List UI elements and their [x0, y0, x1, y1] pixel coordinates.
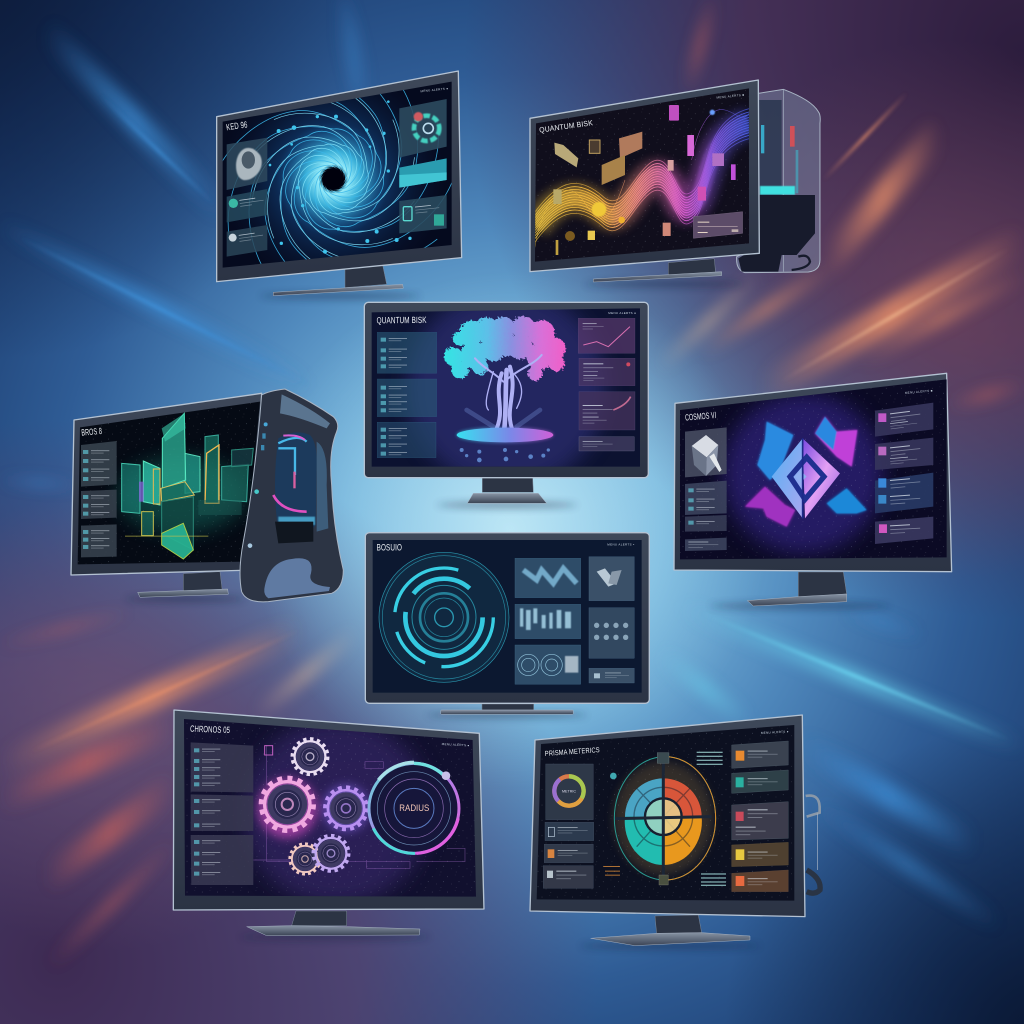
dial label: RADIUS [399, 803, 429, 813]
side cable device [806, 796, 820, 893]
crystal emblem [680, 379, 947, 559]
monitor 8: radial metrics dashboard [530, 715, 820, 946]
title: BOSUIO [377, 543, 402, 553]
top bar: MENU ALERTS ● [420, 86, 449, 93]
wave chart [535, 88, 749, 262]
top bar: MENU ALERTS ■ [905, 389, 933, 395]
title: COSMOS VI [685, 410, 717, 423]
bezel [217, 71, 462, 282]
left panels [191, 742, 253, 885]
top bar: MENU ALERTS ● [761, 730, 789, 735]
spiral chart [222, 90, 452, 264]
screen [373, 540, 642, 693]
floating tiles [553, 105, 736, 255]
left panels [377, 332, 437, 458]
monitor 3: quantum tree dashboard [364, 288, 648, 503]
monitor 6: concentric rings dashboard [365, 533, 649, 714]
title: PRISMA METERICS [545, 745, 600, 758]
monitor 1: spiral galaxy dashboard [212, 58, 462, 300]
top bar: MENU ALERTS ▪ [607, 543, 635, 547]
holographic panes [78, 402, 260, 564]
bezel [173, 710, 484, 910]
title: QUANTUM BISK [377, 315, 427, 325]
monitor 5: crystal dashboard [674, 373, 952, 606]
right panels [399, 99, 447, 233]
title: BROS 8 [81, 426, 102, 438]
stand [247, 911, 420, 936]
screen [537, 725, 794, 901]
monitor 7: gears and radius dashboard [173, 710, 484, 936]
left panels [543, 764, 594, 888]
stand [593, 259, 722, 282]
data card [693, 212, 743, 238]
top bar: MENU ALERTS ● [442, 742, 470, 747]
curved PC tower [240, 389, 343, 602]
gears chart [184, 718, 476, 905]
stand [591, 915, 750, 946]
ring chart [379, 552, 509, 682]
sharp ray highlights [20, 93, 1010, 752]
left panels [227, 138, 267, 257]
screen [78, 402, 260, 564]
right panels [578, 318, 635, 451]
monitor 4: holographic panes dashboard [71, 389, 343, 602]
stand [441, 704, 573, 714]
title: CHRONOS 05 [190, 724, 230, 735]
bezel [71, 393, 262, 575]
radial wheel chart [537, 725, 794, 901]
screen [372, 308, 640, 467]
stand [467, 478, 547, 503]
stand shadows [125, 281, 890, 949]
left panels: METRIC [562, 789, 576, 793]
right panels [875, 403, 933, 544]
stand [747, 572, 847, 606]
title: QUANTUM BISK [539, 118, 594, 135]
bezel [530, 715, 805, 917]
bezel [364, 302, 648, 478]
title: KED 96 [226, 119, 248, 132]
glass tower [737, 89, 820, 273]
bezel [530, 80, 759, 272]
screen [680, 379, 947, 559]
centre panels [515, 558, 581, 684]
bezel [365, 533, 649, 703]
right panels [589, 557, 634, 683]
top bar: MENU ALERTS ● [608, 311, 636, 315]
top bar: MENU ALERTS ■ [716, 93, 745, 100]
screen [535, 88, 749, 262]
bezel [674, 373, 952, 572]
right panels [732, 741, 788, 892]
monitor 2: quantum wave dashboard [530, 80, 820, 282]
left panels [81, 441, 117, 557]
stand [273, 265, 403, 296]
screen [223, 82, 452, 268]
left panels [685, 427, 727, 551]
screen [184, 719, 476, 897]
tree illustration [399, 310, 615, 466]
stand [138, 572, 228, 597]
